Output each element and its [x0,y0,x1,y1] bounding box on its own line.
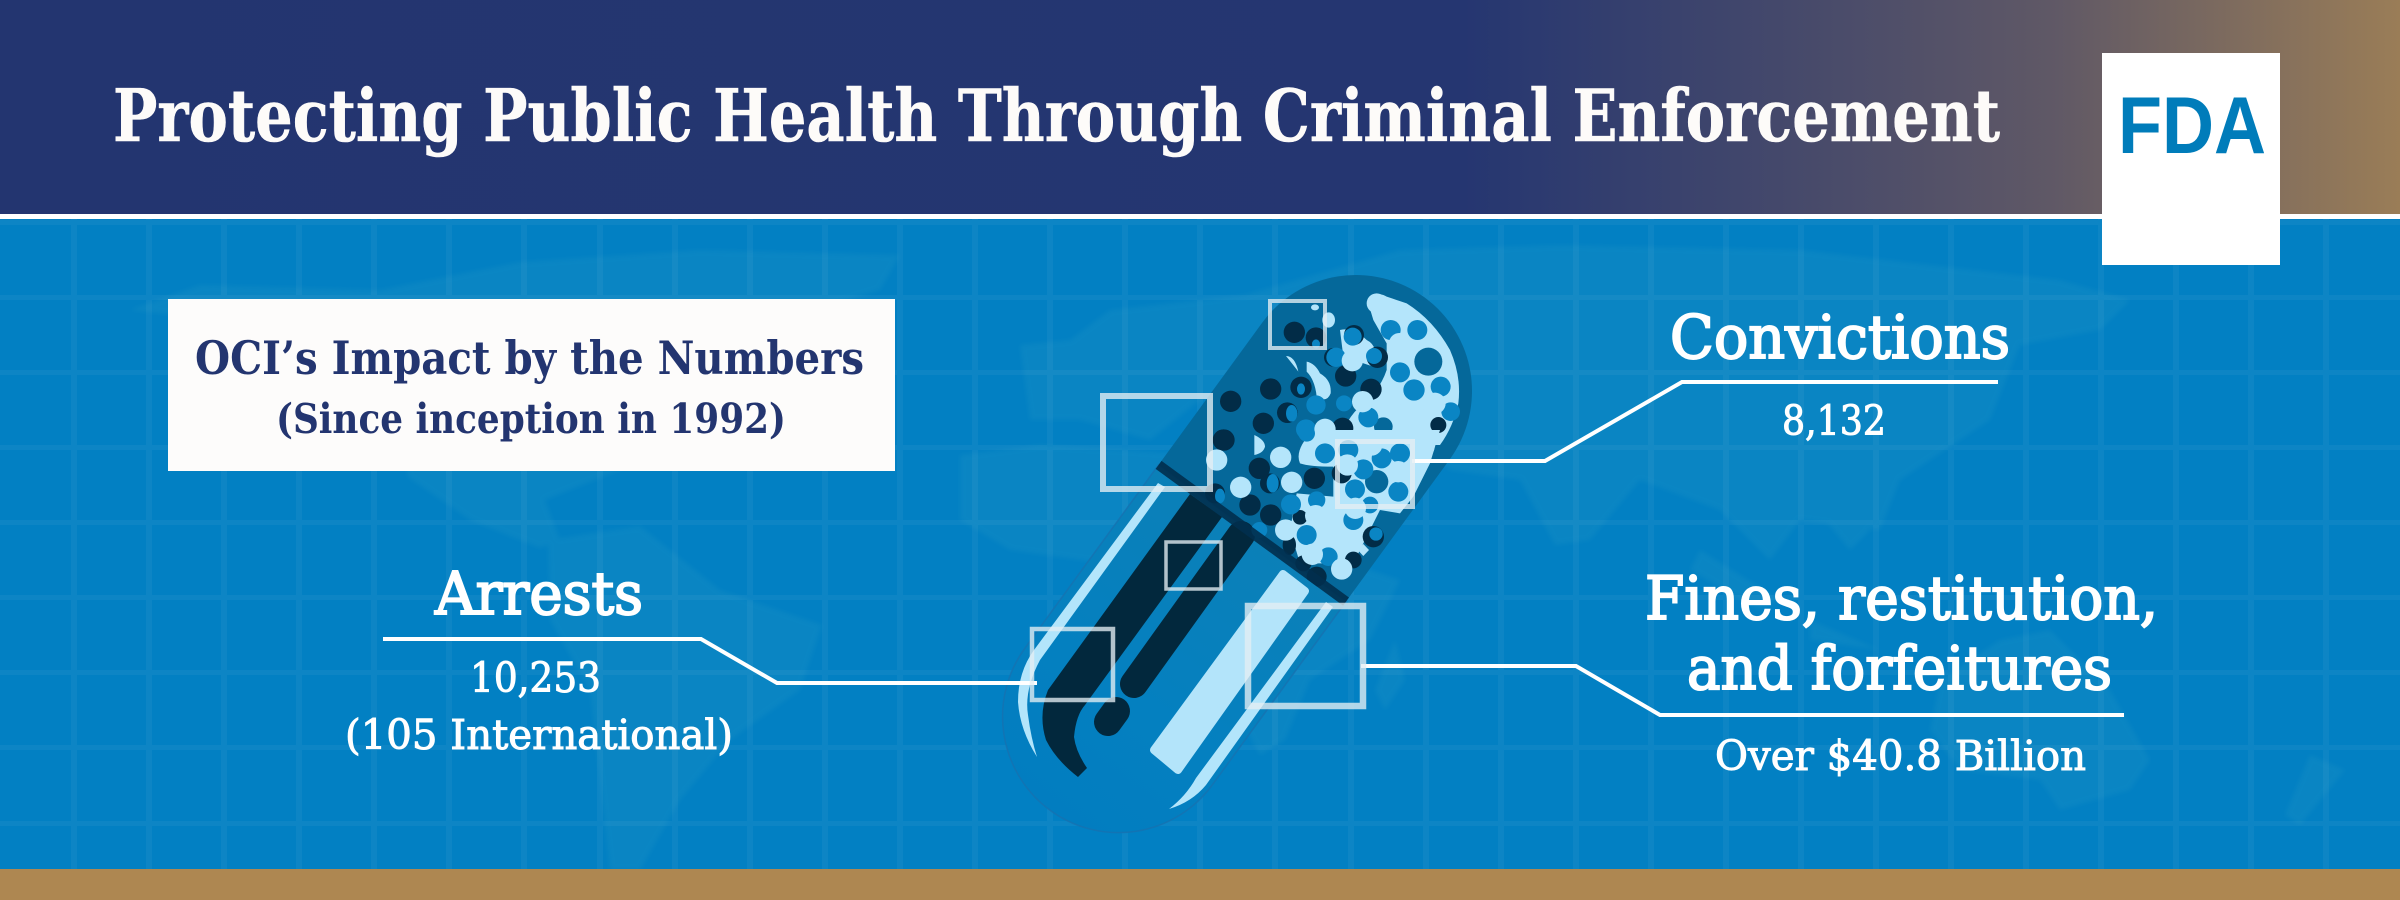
capsule right highlight [1169,602,1333,809]
capsule divider [1156,461,1349,606]
pellets: lower group [1205,422,1440,587]
stat: fines: Fines, restitution, [1645,564,2158,634]
light bar [1154,574,1305,770]
heading panel: OCI's impact: OCI’s Impact by the Numbers [195,331,864,385]
pellets [1205,293,1460,587]
stat: arrests: (105 International) [345,711,733,759]
second dark band [1134,535,1241,684]
stat: convictions: 8,132 [1782,397,1886,445]
FDA logo: FDA [2118,81,2266,171]
leader line: arrests [383,639,1037,683]
leader line: fines [1361,666,2124,715]
capsule lower half [956,465,1346,879]
capsule upper half [1159,229,1518,602]
stat: convictions: Convictions [1670,303,2010,373]
footer band [0,869,2400,900]
stat: convictions [1670,303,2010,445]
blue background [0,219,2400,869]
dark blob [1108,711,1116,722]
pellets: upper group [1213,293,1460,453]
stat: fines: and forfeitures [1687,634,2112,704]
capsule left highlight [1018,483,1165,757]
stat: fines: Over $40.8 Billion [1715,732,2086,780]
FDA logo [2102,53,2280,265]
heading panel: OCI's impact: (Since inception in 1992) [276,395,786,443]
heading panel: OCI's impact [168,299,895,471]
capsule illustration [956,229,1518,879]
world map [130,245,2345,870]
header band [0,0,2400,214]
title: Protecting Public Health Through Criminal Enforcement [113,73,2000,158]
leader line: convictions [1412,382,1998,461]
stat: arrests [345,559,733,759]
main dark band [1042,494,1222,777]
stat: fines [1645,564,2158,780]
stat: arrests: 10,253 [470,654,601,702]
highlight squares [1032,301,1412,706]
stat: arrests: Arrests [434,559,643,628]
